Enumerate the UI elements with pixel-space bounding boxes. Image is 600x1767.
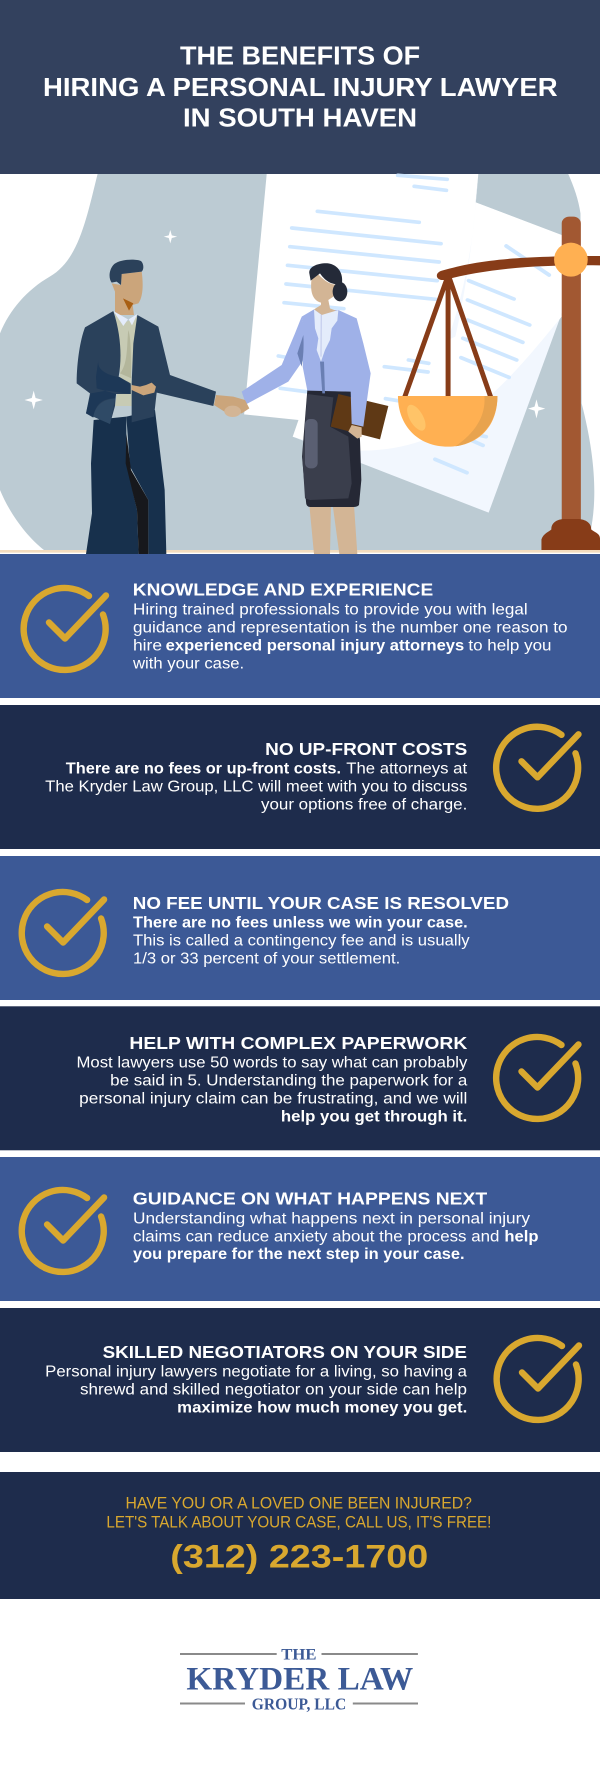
heading: NO UP-FRONT COSTS [265,739,467,759]
body text: help [504,1228,538,1245]
body text: maximize how much money you get. [177,1399,467,1416]
heading: SKILLED NEGOTIATORS ON YOUR SIDE [103,1342,467,1362]
heading: HELP WITH COMPLEX PAPERWORK [129,1033,468,1053]
body text [45,760,468,813]
body text: claims can reduce anxiety about the process and [133,1228,499,1245]
call to action text: LET'S TALK ABOUT YOUR CASE, CALL US, IT'S FREE! [106,1514,491,1532]
body text: Understanding what happens next in personal injury [133,1210,530,1227]
icon: check circle [496,1037,578,1119]
body text: hire [133,638,162,654]
heading: KNOWLEDGE AND EXPERIENCE [133,580,433,600]
body text: There are no fees or up-front costs. [66,760,341,777]
sparkles [24,230,545,418]
body text: to help you [468,638,552,654]
title: IN SOUTH HAVEN [183,105,417,133]
panel: guidance on what happens next [0,1157,600,1301]
panel: no fee until your case is resolved [0,856,600,1000]
phone number: (312) 223-1700 [170,1538,428,1574]
icon: check circle [22,1190,104,1272]
logo: The Kryder Law Group, LLC [180,1647,418,1713]
body text [133,914,470,967]
title [43,42,558,133]
body text: There are no fees unless we win your case. [133,914,468,931]
title: HIRING A PERSONAL INJURY LAWYER [43,74,558,102]
body text: Personal injury lawyers negotiate for a living, so having a [45,1363,467,1380]
background blob [0,174,594,550]
call to action panel [0,1472,600,1599]
icon: check circle [22,892,104,974]
heading: GUIDANCE ON WHAT HAPPENS NEXT [133,1189,488,1209]
body text: Most lawyers use 50 words to say what can probably [76,1055,468,1072]
logo: The Kryder Law Group, LLC: THE [281,1647,316,1664]
body text: your options free of charge. [261,796,467,813]
panel: no up-front costs [0,705,600,849]
body text [76,1055,468,1125]
body text: be said in 5. Understanding the paperwork for a [110,1073,468,1090]
scale of justice [398,217,600,550]
title: THE BENEFITS OF [180,42,420,70]
body text: experienced personal injury attorneys [166,638,464,654]
body text [45,1363,467,1416]
body text: guidance and representation is the number one reason to [133,620,568,636]
body text: with your case. [132,656,244,672]
body text [132,601,568,672]
heading: NO FEE UNTIL YOUR CASE IS RESOLVED [133,893,509,913]
floor line [0,550,600,553]
body text: The attorneys at [346,760,468,777]
documents [244,174,574,513]
panel: knowledge and experience [0,554,600,698]
body text: help you get through it. [281,1108,467,1125]
icon: check circle [496,727,578,809]
call to action text: HAVE YOU OR A LOVED ONE BEEN INJURED? [126,1495,472,1513]
body text: shrewd and skilled negotiator on your side can help [80,1381,467,1398]
woman in blouse and skirt [242,263,388,554]
body text: you prepare for the next step in your case. [133,1246,465,1263]
logo: The Kryder Law Group, LLC: GROUP, LLC [252,1694,346,1713]
logo: The Kryder Law Group, LLC: KRYDER LAW [186,1661,413,1697]
panel: skilled negotiators on your side [0,1308,600,1452]
body text: personal injury claim can be frustrating, and we will [79,1090,467,1107]
body text: 1/3 or 33 percent of your settlement. [133,950,400,967]
body text [133,1210,538,1263]
body text: The Kryder Law Group, LLC will meet with you to discuss [45,778,468,795]
icon: check circle [497,1338,579,1420]
man in suit [77,260,216,554]
body text: Hiring trained professionals to provide you with legal [133,601,528,618]
panel: help with complex paperwork [0,1006,600,1150]
body text: This is called a contingency fee and is usually [133,932,470,949]
handshake [214,395,249,417]
header banner [0,0,600,174]
icon: check circle [24,588,106,670]
call to action text [106,1495,491,1532]
illustration: lawyer handshake with scales of justice [0,174,600,554]
